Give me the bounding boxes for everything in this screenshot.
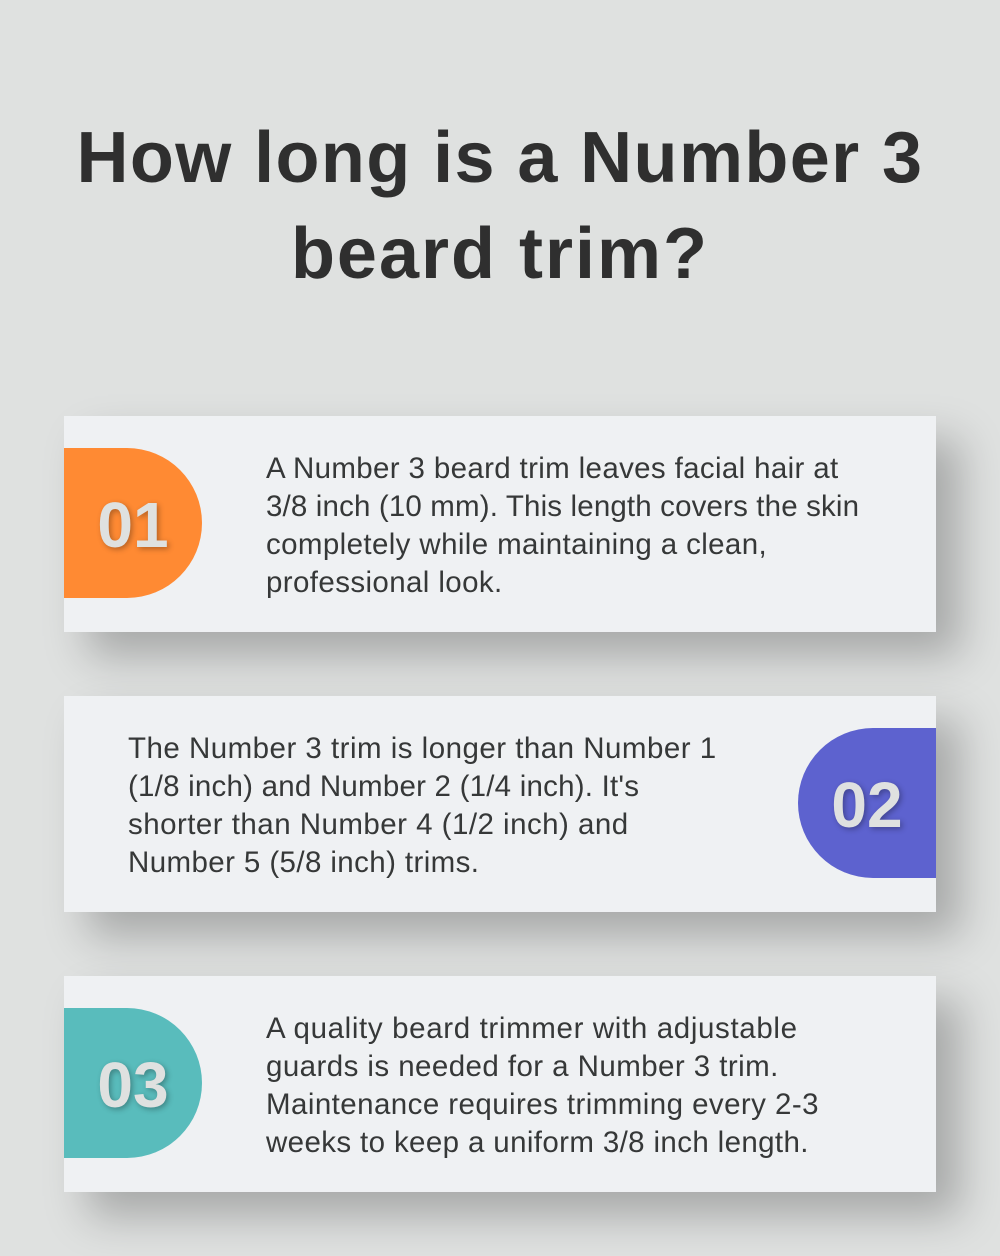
badge: 01: 01 [97, 489, 169, 561]
text: step 01 description: 3/8 inch (10 mm). This length covers the skin [266, 490, 859, 523]
title: beard trim? [291, 214, 709, 294]
badge: 02: 02 [831, 769, 903, 841]
text: step 03 description: A quality beard trimmer with adjustable [266, 1012, 798, 1045]
text: step 02 description: (1/8 inch) and Number 2 (1/4 inch). It's [128, 770, 639, 803]
text: step 03 description [266, 1012, 819, 1159]
badge: 03: 03 [97, 1049, 169, 1121]
badge: 01 [64, 448, 202, 598]
badge: 02 [798, 728, 936, 878]
title: How long is a Number 3 [77, 118, 923, 198]
text: step 01 description: professional look. [266, 566, 503, 599]
text: step 01 description [266, 452, 859, 599]
badge: 03 [64, 1008, 202, 1158]
panel: step 03 [64, 976, 936, 1192]
text: step 03 description: weeks to keep a uniform 3/8 inch length. [266, 1126, 809, 1159]
text: step 03 description: Maintenance requires trimming every 2-3 [266, 1088, 819, 1121]
title [77, 118, 923, 294]
text: step 02 description [128, 732, 717, 879]
text: step 02 description: Number 5 (5/8 inch) trims. [128, 846, 479, 879]
text: step 03 description: guards is needed for a Number 3 trim. [266, 1050, 779, 1083]
panel: step 01 [64, 416, 936, 632]
text: step 02 description: shorter than Number 4 (1/2 inch) and [128, 808, 629, 841]
text: step 02 description: The Number 3 trim is longer than Number 1 [128, 732, 717, 765]
text: step 01 description: A Number 3 beard trim leaves facial hair at [266, 452, 839, 485]
panel: step 02 [64, 696, 936, 912]
text: step 01 description: completely while maintaining a clean, [266, 528, 767, 561]
